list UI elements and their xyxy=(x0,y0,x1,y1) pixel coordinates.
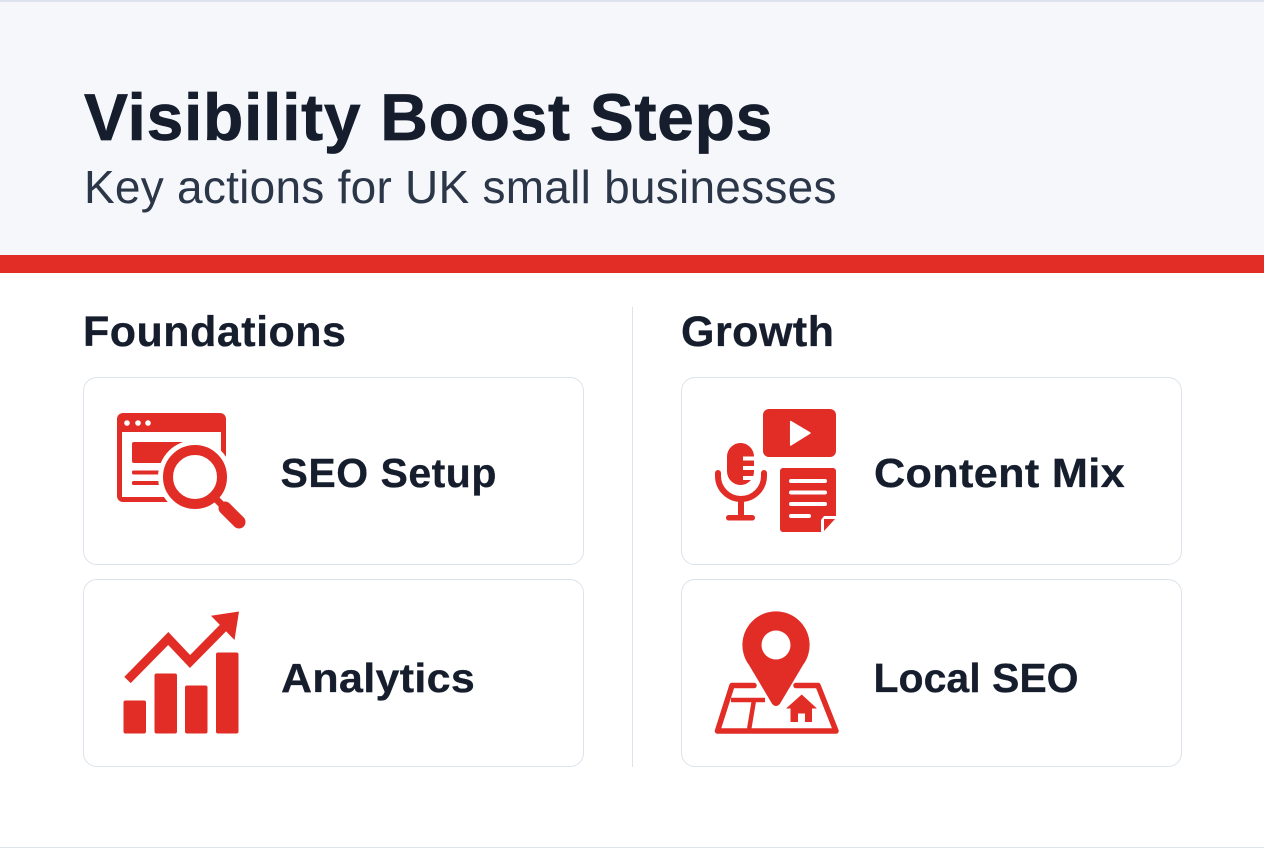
label: Analytics: Analytics xyxy=(280,654,475,700)
heading: Growth: Growth xyxy=(681,308,834,356)
card: Content Mix xyxy=(680,376,1182,564)
subtitle: Key actions for UK small businesses xyxy=(84,161,837,213)
label: Content Mix: Content Mix xyxy=(874,450,1124,496)
red accent bar xyxy=(0,255,1264,273)
icon: microphone, video and document xyxy=(718,409,837,533)
header band xyxy=(0,0,1264,255)
card: Analytics xyxy=(82,578,584,766)
bottom edge line xyxy=(0,846,1264,848)
icon: map pin with house xyxy=(718,611,836,731)
card: SEO Setup xyxy=(82,376,584,564)
label: SEO Setup: SEO Setup xyxy=(280,450,497,496)
heading: Foundations: Foundations xyxy=(83,308,346,356)
label: Local SEO: Local SEO xyxy=(874,654,1079,700)
icon: analytics chart with arrow xyxy=(124,612,239,734)
card: Local SEO xyxy=(680,578,1182,766)
title: Visibility Boost Steps xyxy=(84,80,773,154)
icon: browser window with magnifier xyxy=(117,413,239,522)
column divider xyxy=(632,307,633,767)
